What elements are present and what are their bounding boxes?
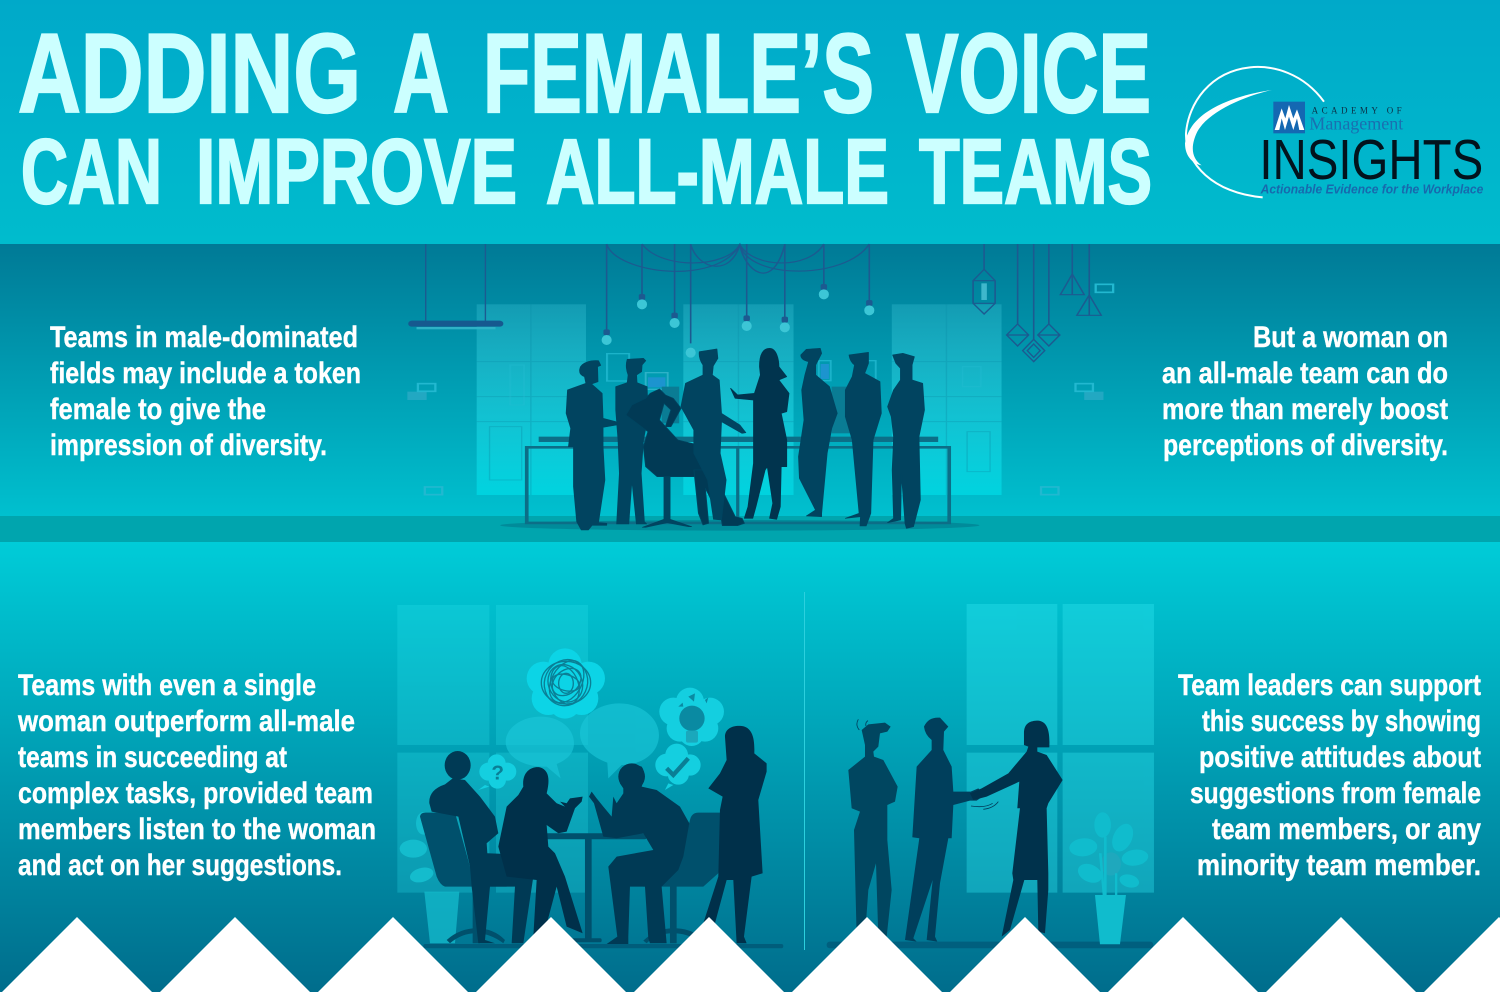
logo management text: Management xyxy=(1309,113,1403,133)
office panel background xyxy=(0,244,1500,516)
person 5 woman xyxy=(731,348,789,519)
lower text block left: complex tasks, provided team xyxy=(18,777,373,810)
logo: Academy of Management Insights xyxy=(1185,67,1483,197)
title line 2 xyxy=(21,121,1152,223)
logo tagline: Actionable Evidence for the Workplace xyxy=(1260,181,1483,196)
first text block right: But a woman on xyxy=(1253,321,1448,354)
title line 2: IMPROVE xyxy=(196,121,517,223)
seated legs xyxy=(694,470,744,526)
man shaking hands xyxy=(905,718,985,942)
thought cloud lightbulb xyxy=(659,688,724,746)
left chair xyxy=(420,813,508,943)
header background xyxy=(0,0,1500,244)
wall frames xyxy=(510,354,981,405)
meeting scene illustration xyxy=(397,605,783,948)
title line 1: ADDING xyxy=(18,11,361,136)
office floor xyxy=(0,516,1500,542)
hanging bulbs and wires xyxy=(602,244,874,358)
lower text block left: and act on her suggestions. xyxy=(18,849,342,882)
window xyxy=(397,605,588,893)
title line 2: TEAMS xyxy=(919,121,1152,223)
first text block left: fields may include a token xyxy=(50,357,361,390)
person 4 xyxy=(681,349,746,520)
desk and floor shadow xyxy=(500,437,980,531)
first text block right: perceptions of diversity. xyxy=(1163,429,1448,462)
person 6 xyxy=(799,348,837,517)
floor shadow xyxy=(423,944,783,948)
standing woman xyxy=(703,726,767,943)
thought cloud scribble xyxy=(527,648,605,719)
team silhouettes xyxy=(566,348,924,530)
thought cloud check xyxy=(655,744,701,790)
back windows xyxy=(477,304,1002,495)
title line 2: CAN xyxy=(21,121,162,223)
first text block left xyxy=(50,321,361,462)
seated woman xyxy=(498,767,583,937)
woman shaking hands xyxy=(970,721,1063,937)
person 2 xyxy=(616,358,648,524)
floor shadow xyxy=(827,942,1153,948)
lower text block left: teams in succeeding at xyxy=(18,741,287,774)
table xyxy=(512,833,647,942)
lower text block left: members listen to the woman xyxy=(18,813,376,846)
title xyxy=(18,11,1152,223)
logo arc xyxy=(1186,67,1324,197)
first text block left: impression of diversity. xyxy=(50,429,327,462)
person 1 xyxy=(566,361,617,530)
chair xyxy=(642,475,692,527)
logo academy text: ACADEMY OF xyxy=(1312,105,1402,115)
ceiling lamp left xyxy=(408,244,503,329)
seated man left xyxy=(429,751,533,943)
lower text block left: woman outperform all-male xyxy=(17,705,355,738)
thought cloud question xyxy=(478,754,516,790)
title line 1: FEMALE’S xyxy=(483,11,874,136)
plant xyxy=(400,812,459,943)
handshake scene illustration xyxy=(827,604,1154,948)
first text block right xyxy=(1162,321,1448,462)
person 7 xyxy=(845,352,881,526)
logo swoosh xyxy=(1185,90,1272,165)
title line 2: ALL-MALE xyxy=(546,121,889,223)
title line 1: A xyxy=(393,11,449,136)
wall bricks xyxy=(407,392,1103,400)
seated person xyxy=(626,389,712,477)
title line 1 xyxy=(18,11,1151,136)
man with crossed arms xyxy=(848,723,898,937)
panel divider xyxy=(804,592,805,950)
first text block left: female to give the xyxy=(50,393,266,426)
window shelves xyxy=(477,304,1002,495)
office scene illustration xyxy=(407,244,1113,531)
potted plant xyxy=(1069,812,1149,944)
right chair xyxy=(640,813,728,943)
lower panel background xyxy=(0,542,1500,992)
lower text block left: Teams with even a single xyxy=(18,669,316,702)
logo emblem xyxy=(1273,102,1305,133)
lower text block left xyxy=(17,669,376,882)
first text block right: an all-male team can do xyxy=(1162,357,1448,390)
first text block left: Teams in male-dominated xyxy=(50,321,358,354)
first text block right: more than merely boost xyxy=(1162,393,1448,426)
lower text block right xyxy=(1178,669,1481,882)
seated man right xyxy=(589,763,689,944)
geometric pendant lamps xyxy=(973,244,1101,362)
white zigzag bottom edge xyxy=(0,917,1500,1000)
window xyxy=(967,604,1154,893)
person 8 xyxy=(888,353,924,528)
speech bubbles xyxy=(506,703,659,778)
title line 1: VOICE xyxy=(906,11,1151,136)
motion lines xyxy=(857,719,998,809)
thought cloud question: ? xyxy=(491,761,504,784)
